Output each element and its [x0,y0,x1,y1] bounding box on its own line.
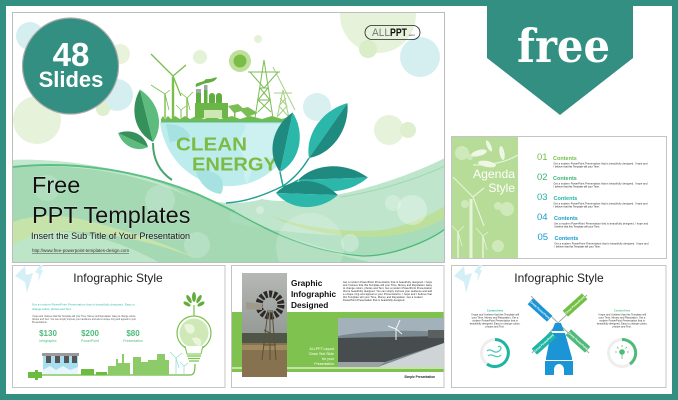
heading: Infographic Style [73,271,163,285]
title text: PPT Templates [32,202,190,228]
heading: Designed [291,300,328,310]
icon: wind turbines [151,54,193,118]
title text: Insert the Sub Title of Your Presentation [31,231,190,242]
stats [39,329,143,343]
left text: photos and Text. [486,324,505,328]
heading [291,278,337,310]
agenda list: Contents [553,176,577,182]
icon: green branch [115,87,172,180]
text block: a unique zing and appeal to your Presentations. I hope and I believe that [343,293,432,296]
text block: that is beautifully designed. You can simply impress your audience and add [343,290,433,293]
icon: lightning [454,265,482,293]
donut: light [608,339,636,366]
panel: main title slide [12,12,445,263]
heading: Graphic [291,278,323,288]
agenda list: I believe that this Template will your Time. [554,246,601,248]
agenda sidebar: Agenda [473,167,515,181]
panel: infographic energy line [12,265,225,388]
stats: Infographic [39,339,57,343]
agenda list: 02 [537,172,548,183]
stats: $130 [39,329,57,338]
text block: Get a modern PowerPoint Presentation that is beautifully designed. I hope [343,281,433,284]
badge: 48 slides: Slides [39,67,103,92]
logo: allppt: PPT [390,27,407,39]
agenda list: I believe that this Template will your Time. [554,226,600,228]
stats: Presentation [123,339,143,343]
heading: clean energy: ENERGY [192,155,277,175]
icon: windmill: Great PowerPoint [564,295,586,315]
left text [470,308,521,328]
icon: windmill: Great PowerPoint [567,331,589,351]
agenda list: Get a modern PowerPoint Presentation that is beautifully designed. I hope and [554,202,648,206]
clean energy illustration [151,50,295,122]
left text: I hope and I believe that this Template will [471,312,519,316]
ribbon: free: free [517,19,610,73]
panel: infographic windmill [452,265,666,388]
donut: wind [482,340,508,366]
text block: to change colors, photos and Text. Get a modern PowerPoint Presentation [343,287,433,290]
agenda list: Get a modern PowerPoint Presentation that is beautifully designed. I hope and [554,222,649,226]
agenda list: 03 [537,192,548,203]
right text: photos and Text. [612,324,632,328]
icon: windmill: Great PowerPoint [529,300,551,320]
green waves [13,158,444,262]
icon: lightning [15,265,43,293]
band caption: ALLPPT Layout [310,347,334,351]
icon: pylons [248,60,295,118]
band caption: for your [322,357,335,361]
right text: I hope and I believe that this Template will [598,312,646,316]
left text: your Time, Money and Reputation. Get a [472,316,519,320]
text block: change colors, photos and Text. [32,307,72,311]
agenda list: 04 [537,212,548,223]
right text [597,308,648,328]
left text: modern PowerPoint Presentation that is [472,318,519,322]
badge: 48 slides: 48 [53,36,89,73]
stats: $80 [126,329,140,338]
text block: Presentations. [32,321,48,324]
title text [31,172,190,253]
icon: factory [195,77,228,118]
agenda list: I believe that this Template will your Time. [554,206,600,208]
photo: windmill [242,273,287,377]
stats: PowerPoint [81,339,99,343]
text block: PowerPoint Presentation that is beautifully designed. [343,299,405,302]
heading: Infographic [291,289,337,299]
band caption: Clean Text Slide [309,352,334,356]
icon: light bulb globe [177,292,211,361]
right text: modern PowerPoint Presentation that is [599,318,646,322]
right text: beautifully designed. Easy to change colors, [597,322,648,326]
heading: clean energy: CLEAN [176,135,247,155]
left text: Content Here [487,308,504,312]
title text: Free [32,172,80,198]
icon: solar panels [228,104,258,118]
band caption [309,347,335,366]
ribbon: free [487,6,633,115]
left text: beautifully designed. Easy to change colors, [470,322,521,326]
agenda sidebar [452,137,518,258]
text block: photos and Text. You can simply impress your audience and add a unique zing and appeal to your [32,318,136,321]
agenda list: 05 [538,232,548,243]
text block [32,302,136,324]
agenda list: Get a modern PowerPoint Presentation that is beautifully designed. I hope and [554,162,648,166]
green band [232,312,444,372]
energy line with dam, city and plug [28,352,195,380]
agenda list: I believe that this Template will your Time. [554,166,600,168]
agenda list [537,152,649,248]
heading: clean energy [176,135,277,175]
photo: solar field [338,318,444,367]
icon: windmill [528,293,590,375]
agenda sidebar: Style [488,181,515,195]
text block [343,281,433,302]
text block: and I believe that this Template will your Time, Money and Reputation. Easy [343,284,433,287]
icon: windmill: Great PowerPoint [533,333,555,353]
title text: http://www.free-powerpoint-templates-design.com [32,248,130,253]
text block: I hope and I believe that this Template will your Time, Money and Reputation. Easy to change colors, [32,315,136,318]
heading: Infographic Style [514,271,604,285]
background bubbles [13,0,440,145]
agenda list: 01 [537,152,548,163]
agenda list: Get a modern PowerPoint Presentation that is beautifully designed. I hope and [554,242,649,246]
logo: allppt: ALL [372,27,390,39]
right text: your Time, Money and Reputation. Get a [599,316,646,320]
stats: $200 [81,329,99,338]
panel: graphic infographic designed [232,266,444,388]
caption: Simple Presentation [404,375,435,379]
text block: Get a modern PowerPoint Presentation that is beautifully designed. Easy to [32,302,135,306]
agenda list: Contents [554,196,577,202]
agenda list: I believe that this Template will your Time. [554,186,600,188]
globe hemisphere [160,122,298,194]
agenda list: Contents [554,236,578,242]
badge: 48 slides [22,18,118,114]
text block: this Template will your Time, Money and Reputation. Get a modern [343,296,424,299]
right text: Content Here [614,308,631,312]
agenda list: Get a modern PowerPoint Presentation that is beautifully designed. I hope and [554,182,648,186]
band caption: Presentation [314,362,334,366]
panel: agenda slide [452,136,666,258]
agenda list: Contents [554,216,578,222]
icon: teal branch [226,96,368,208]
logo: allppt: .com [408,33,415,37]
icon: sun [229,50,251,72]
agenda list: Contents [553,156,577,162]
logo: allppt [365,26,420,40]
